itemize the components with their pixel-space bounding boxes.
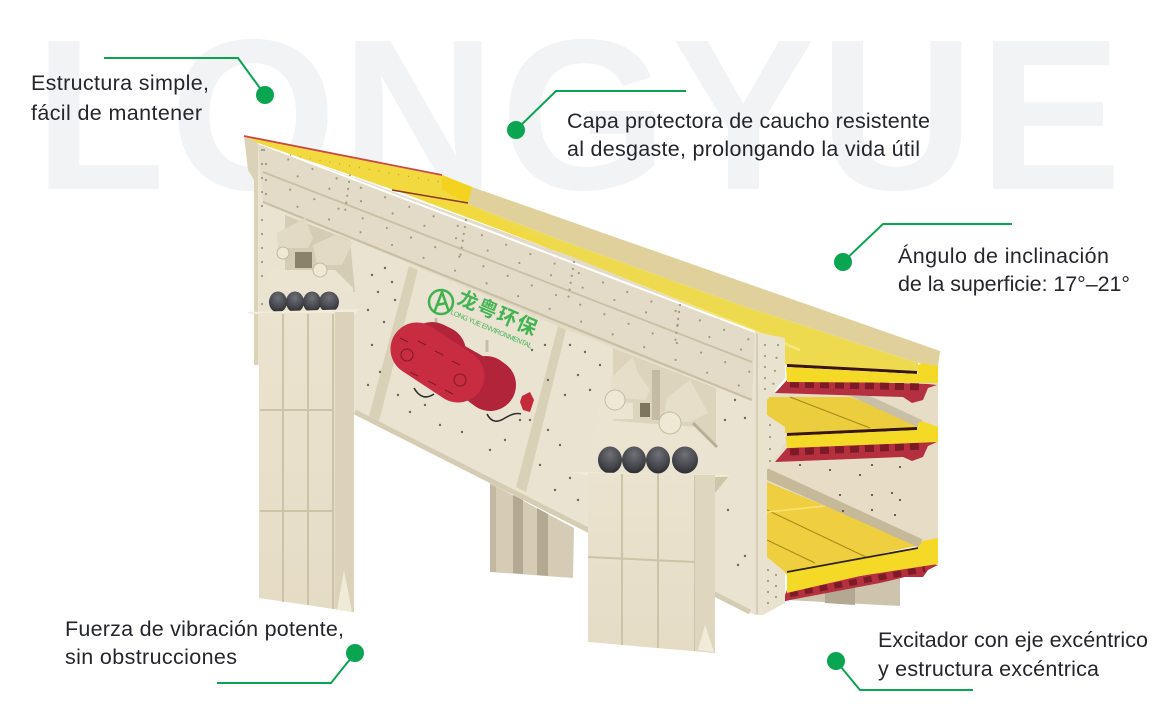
left rubber balls (269, 292, 339, 312)
exciter cables and junction box (414, 388, 521, 421)
leader line (104, 58, 265, 95)
upper deck highlight (600, 270, 800, 350)
callout: simple structure (31, 58, 274, 125)
marker dot (346, 644, 364, 662)
marker dot (827, 652, 845, 670)
leader line (516, 91, 686, 130)
right spring support and foot (570, 348, 733, 653)
left wall recess (285, 215, 355, 292)
logo Chinese name: 龙粤环保 (454, 282, 542, 341)
callout text: Estructura simple, (31, 71, 209, 95)
yellow lip 3 (787, 538, 938, 593)
side plate (244, 136, 755, 615)
callout: eccentric exciter (827, 628, 1148, 690)
exciter front cover (417, 349, 458, 376)
callout text: Ángulo de inclinación (898, 243, 1109, 268)
right cut-out (640, 403, 650, 417)
rear top yellow wedge (244, 136, 570, 255)
company logo on plate (429, 282, 542, 350)
rear support feet (490, 483, 900, 606)
deck 3 screen surface (767, 482, 920, 575)
logo English name: LONG YUE ENVIRONMENTAL (449, 309, 533, 350)
marker dot (507, 121, 525, 139)
red underside 1 (775, 380, 937, 403)
upper deck yellow surface (468, 204, 918, 372)
lower edge band (355, 412, 750, 612)
left flap (244, 136, 258, 365)
right bracket plate 2 (663, 380, 708, 422)
watermark: LONGYUE: LONGYUE (34, 0, 1122, 235)
right wall recess (613, 348, 716, 447)
callout: rubber protective layer (507, 91, 930, 161)
vents and emblems (400, 338, 466, 394)
right bracket base (583, 420, 718, 447)
callout text (65, 617, 344, 669)
leader line (843, 224, 1012, 262)
callout: vibration force (65, 617, 364, 683)
right bracket plate 1 (610, 357, 650, 400)
callout text: de la superficie: 17°–21° (898, 272, 1130, 296)
left cut-out (295, 252, 312, 268)
right flange (570, 472, 733, 477)
right rubber balls (598, 446, 698, 474)
top reinforcing band (258, 143, 755, 400)
logo emblem (429, 290, 453, 314)
leader line (836, 661, 973, 690)
yellow lip 1 (786, 363, 938, 383)
right foot body (588, 473, 715, 653)
red exciter (400, 318, 534, 421)
callout text (567, 109, 930, 161)
left foot body (259, 313, 354, 612)
leader line (217, 653, 355, 683)
left bracket base (260, 270, 353, 292)
callout text: al desgaste, prolongando la vida útil (567, 137, 920, 161)
marker dot (834, 253, 852, 271)
vibrating screen machine (244, 136, 940, 653)
exciter shafts (434, 318, 438, 330)
deck lips and red undersides (775, 363, 938, 602)
callout text: Capa protectora de caucho resistente (567, 109, 930, 133)
diagonal stiffeners (369, 266, 418, 421)
callout: inclination angle (834, 224, 1130, 296)
left spring support and foot (247, 215, 360, 612)
red underside 3 (782, 563, 938, 602)
marker dot (256, 86, 274, 104)
left bracket plate 1 (277, 218, 313, 248)
callout text: fácil de mantener (31, 101, 202, 125)
interior of the screen box (765, 380, 938, 575)
callout text (31, 71, 209, 125)
callout text: sin obstrucciones (65, 645, 237, 669)
scattered holes (367, 267, 746, 566)
red underside 2 (775, 442, 937, 462)
slot 1 (787, 364, 917, 374)
upper deck tan far band (468, 187, 940, 366)
deck 2 surface (767, 397, 920, 434)
slot 2 (787, 427, 917, 436)
yellow lip 2 (786, 421, 938, 448)
left bracket plate 2 (313, 235, 353, 265)
callout text: Excitador con eje excéntrico (878, 628, 1148, 652)
callout text: y estructura excéntrica (878, 657, 1099, 681)
callout text: Fuerza de vibración potente, (65, 617, 344, 641)
callout text (898, 243, 1130, 296)
exciter rear body (432, 348, 490, 385)
left flange (247, 309, 360, 314)
deck 3 side beam (767, 468, 922, 548)
rivet rows (262, 150, 750, 608)
right end post (755, 332, 785, 615)
right bracket block (598, 403, 633, 419)
callout text (878, 628, 1148, 681)
